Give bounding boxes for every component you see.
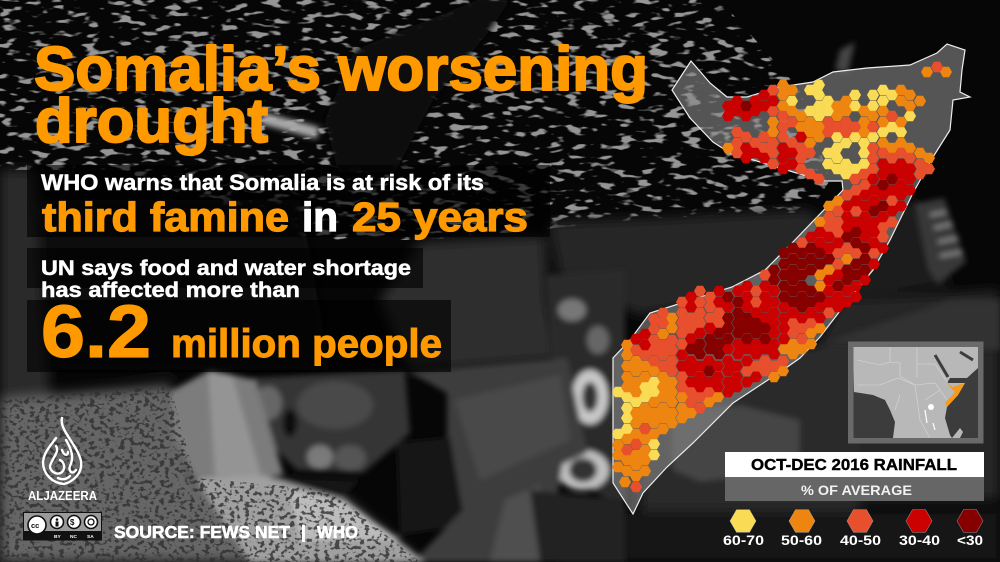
icon: creative commons badge: cc [31,521,39,530]
legend scale [723,510,983,548]
icon: creative commons badge: SA [87,534,94,540]
legend scale: 40-50 [840,532,881,548]
fabric pattern [545,270,625,510]
icon: creative commons badge: $ [70,518,75,527]
icon: creative commons badge: NC [70,534,77,540]
famine highlight: in [302,194,338,240]
country outline [613,44,970,514]
source: SOURCE: FEWS NET [114,522,290,542]
panel: people affected [27,248,451,373]
big number: million people [171,322,442,366]
face [252,370,410,473]
map: Somalia rainfall [613,44,970,514]
legend scale: <30 [957,532,983,548]
panel: famine warning [27,165,550,240]
inset locator map [848,342,984,444]
legend scale: 30-40 [899,532,940,548]
hexes: 50-60 [618,72,946,482]
Somalia highlight [945,382,965,407]
title: Somalia’s worsening [34,35,648,104]
famine highlight: third famine [42,194,289,240]
icon: calligraphic flame [43,418,81,484]
logo: Al Jazeera: ALJAZEERA [28,488,98,503]
sleeve at right [826,300,1000,350]
watch [914,198,966,284]
big number [41,290,442,373]
famine highlight: 25 years [352,194,528,240]
shortage text: UN says food and water shortage [41,257,411,280]
shortage text [41,257,411,302]
big number: 6.2 [41,290,151,373]
hand holding cloth [325,0,510,172]
famine highlight [42,194,528,240]
dark shirt and forearm [397,437,465,535]
icon: creative commons badge [24,512,102,540]
hexes: 60-70 [618,85,910,455]
shortage text: has affected more than [41,279,300,302]
title [34,35,648,156]
hexes: 40-50 [627,67,937,487]
icon: creative commons badge: BY [54,534,61,540]
legend title: OCT-DEC 2016 RAINFALL [751,457,957,474]
source: WHO [317,522,358,542]
hexes: 30-40 [636,95,910,392]
head cloth [168,370,283,480]
sheet [195,476,425,562]
shirt sleeve [410,358,587,510]
legend scale: 60-70 [723,532,764,548]
famine text line: WHO warns that Somalia is at risk of its [41,170,484,195]
source: | [301,522,306,542]
hexes: under 30 [691,106,892,371]
legend scale: 50-60 [781,532,822,548]
logo: Al Jazeera [28,418,98,503]
title: drought [35,87,268,156]
legend header [725,452,984,501]
legend subtitle: % OF AVERAGE [801,482,912,498]
